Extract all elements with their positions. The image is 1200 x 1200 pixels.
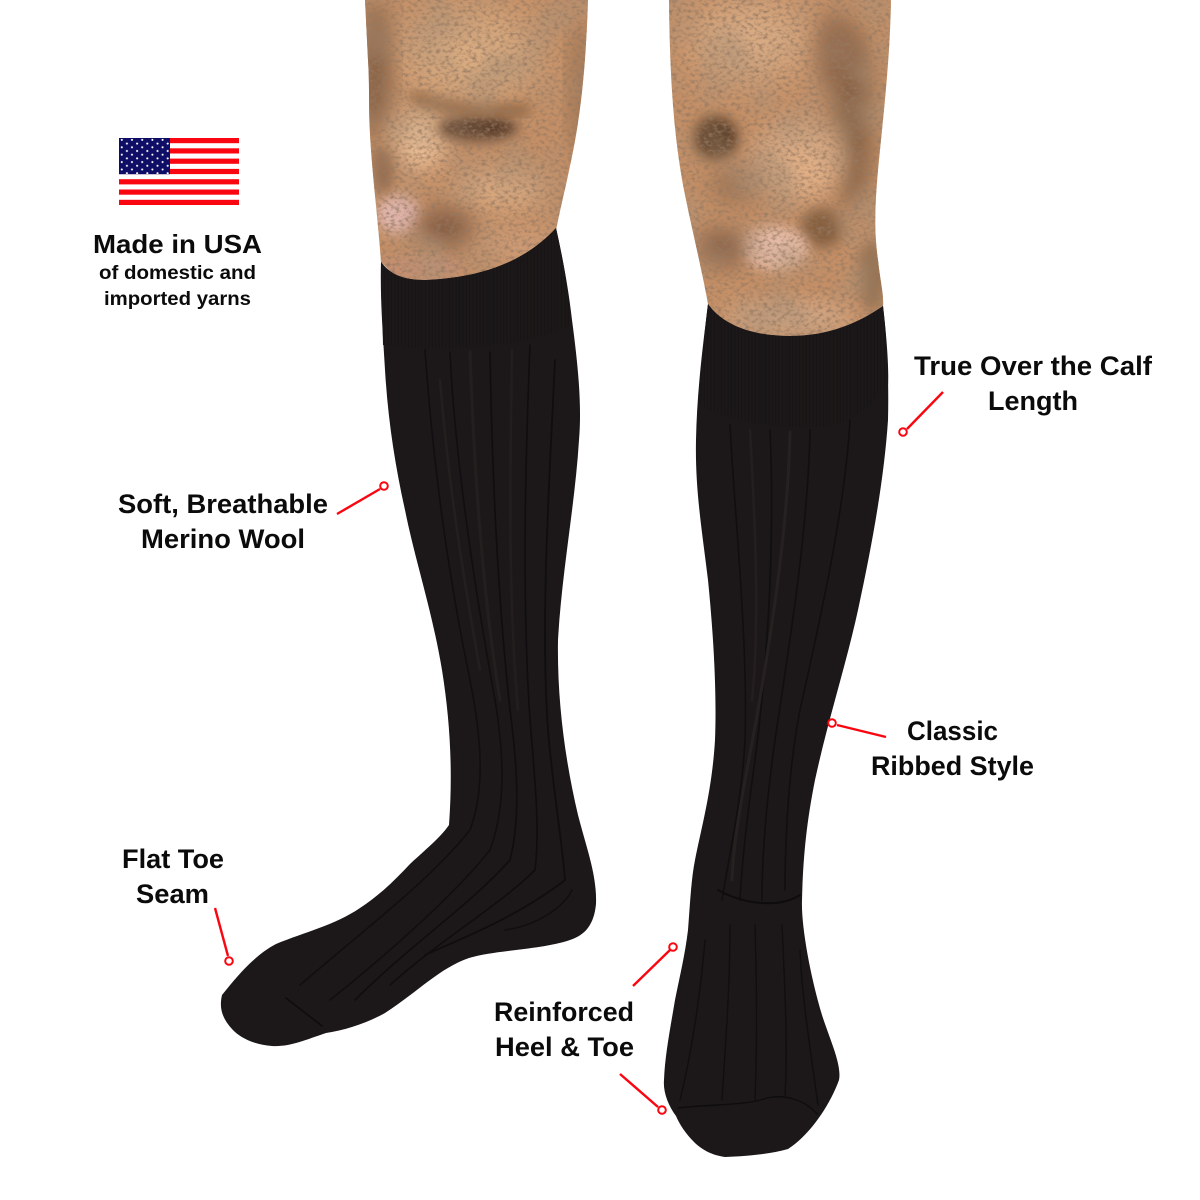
callout: Flat Toe Seam bbox=[122, 844, 233, 965]
callout: Reinforced Heel & Toe: Reinforced bbox=[494, 997, 634, 1027]
callout: True Over the Calf Length bbox=[899, 351, 1153, 436]
heading: Made in USA: of domestic and bbox=[99, 263, 256, 284]
callout: True Over the Calf Length: Length bbox=[988, 386, 1078, 416]
right leg skin bbox=[660, 0, 900, 340]
callout: Classic Ribbed Style: Ribbed Style bbox=[871, 751, 1034, 781]
heading: Made in USA: Made in USA bbox=[93, 229, 262, 259]
callout: Soft, Breathable Merino Wool bbox=[118, 482, 388, 554]
heading: Made in USA bbox=[93, 229, 262, 310]
callout: Reinforced Heel & Toe: Heel & Toe bbox=[495, 1032, 634, 1062]
right sock cuff bbox=[704, 304, 888, 384]
left sock ribbing bbox=[286, 345, 572, 1026]
heading: Made in USA: imported yarns bbox=[104, 289, 251, 310]
callout: Reinforced Heel & Toe bbox=[494, 943, 677, 1114]
callout: Flat Toe Seam: Flat Toe bbox=[122, 844, 224, 874]
callout: True Over the Calf Length: True Over the Calf bbox=[914, 351, 1153, 381]
callout: Classic Ribbed Style bbox=[828, 716, 1034, 781]
icon: US flag bbox=[119, 138, 239, 205]
callout: Soft, Breathable Merino Wool: Merino Wool bbox=[141, 524, 305, 554]
callout: Classic Ribbed Style: Classic bbox=[907, 716, 998, 746]
callout: Soft, Breathable Merino Wool: Soft, Breathable bbox=[118, 489, 328, 519]
callout: Flat Toe Seam: Seam bbox=[136, 879, 209, 909]
left sock cuff bbox=[381, 228, 568, 346]
right sock bbox=[664, 300, 895, 1157]
left sock bbox=[221, 225, 596, 1046]
right sock ribbing bbox=[678, 420, 850, 1114]
left leg skin bbox=[365, 0, 588, 280]
